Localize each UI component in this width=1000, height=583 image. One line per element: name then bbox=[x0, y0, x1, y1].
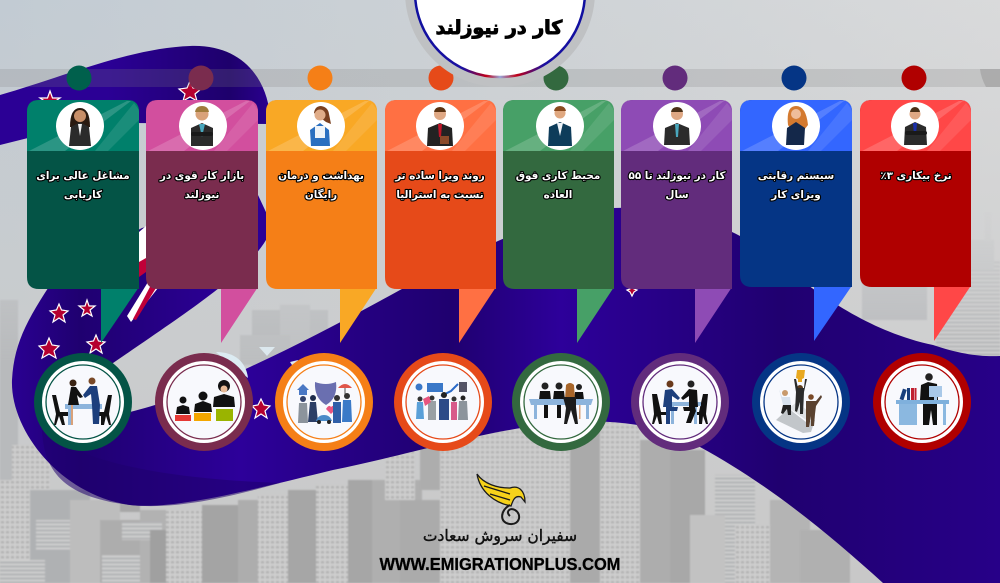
label: ویزای کار bbox=[770, 189, 821, 201]
title badge bbox=[405, 0, 595, 87]
avatar bbox=[69, 108, 91, 146]
card 3 bbox=[266, 100, 377, 343]
flag stripes on ribbon bbox=[127, 226, 158, 322]
label: مشاغل عالی برای bbox=[36, 170, 130, 182]
avatar bbox=[191, 106, 213, 146]
card 7 bbox=[740, 100, 852, 341]
timeline dots bbox=[66, 66, 926, 90]
website url: WWW.EMIGRATIONPLUS.COM bbox=[380, 554, 620, 574]
label: العاده bbox=[544, 189, 572, 201]
icon circle 3: insurance and care bbox=[275, 353, 373, 451]
card 8 bbox=[860, 100, 971, 341]
label: نسبت به استرالیا bbox=[396, 189, 484, 201]
avatar bbox=[664, 107, 690, 145]
label bbox=[394, 170, 485, 201]
label: سال bbox=[665, 189, 689, 201]
icon circle 8: man at desk bbox=[873, 353, 971, 451]
title: کار در نیوزلند bbox=[436, 17, 563, 39]
avatar bbox=[904, 107, 927, 145]
icon circle 1: handshake meeting bbox=[34, 353, 132, 451]
label bbox=[36, 170, 130, 201]
label bbox=[278, 170, 364, 201]
logo text: سفیران سروش سعادت bbox=[423, 527, 577, 546]
avatar bbox=[427, 107, 453, 146]
card 4 bbox=[385, 100, 496, 343]
card 1 bbox=[27, 100, 139, 343]
label: نرخ بیکاری ۳٪ bbox=[880, 170, 952, 182]
card 2 bbox=[146, 100, 258, 343]
avatar bbox=[786, 106, 808, 145]
card 5 bbox=[503, 100, 614, 343]
label: محیط کاری فوق bbox=[516, 170, 600, 182]
label bbox=[758, 170, 834, 201]
icon circle 7: trophy on podium bbox=[752, 353, 850, 451]
label bbox=[628, 170, 726, 201]
icon circle 4: visa crowd bbox=[394, 353, 492, 451]
logo emblem: wing and S bbox=[477, 474, 525, 524]
label: بهداشت و درمان bbox=[278, 170, 364, 182]
avatar bbox=[548, 106, 572, 146]
stars bbox=[39, 81, 637, 418]
avatar bbox=[310, 106, 331, 146]
label: نیوزلند bbox=[185, 189, 219, 201]
label: کاریابی bbox=[64, 189, 103, 201]
label: سیستم رقابتی bbox=[758, 170, 834, 182]
label: روند ویزا ساده تر bbox=[394, 170, 485, 182]
label: رایگان bbox=[305, 188, 337, 201]
logo bbox=[380, 474, 620, 574]
label bbox=[159, 170, 244, 201]
icon circle 6: two men at table bbox=[631, 353, 729, 451]
label: کار در نیوزلند تا ۵۵ bbox=[628, 170, 726, 182]
label: بازار کار قوی در bbox=[159, 170, 244, 182]
card 6 bbox=[621, 100, 732, 343]
light decorative shapes behind circles bbox=[216, 347, 298, 378]
icon circle 2: growing team bbox=[155, 353, 253, 451]
label bbox=[516, 170, 600, 201]
timeline band bbox=[0, 69, 1000, 87]
icon circle 5: team at table bbox=[512, 353, 610, 451]
